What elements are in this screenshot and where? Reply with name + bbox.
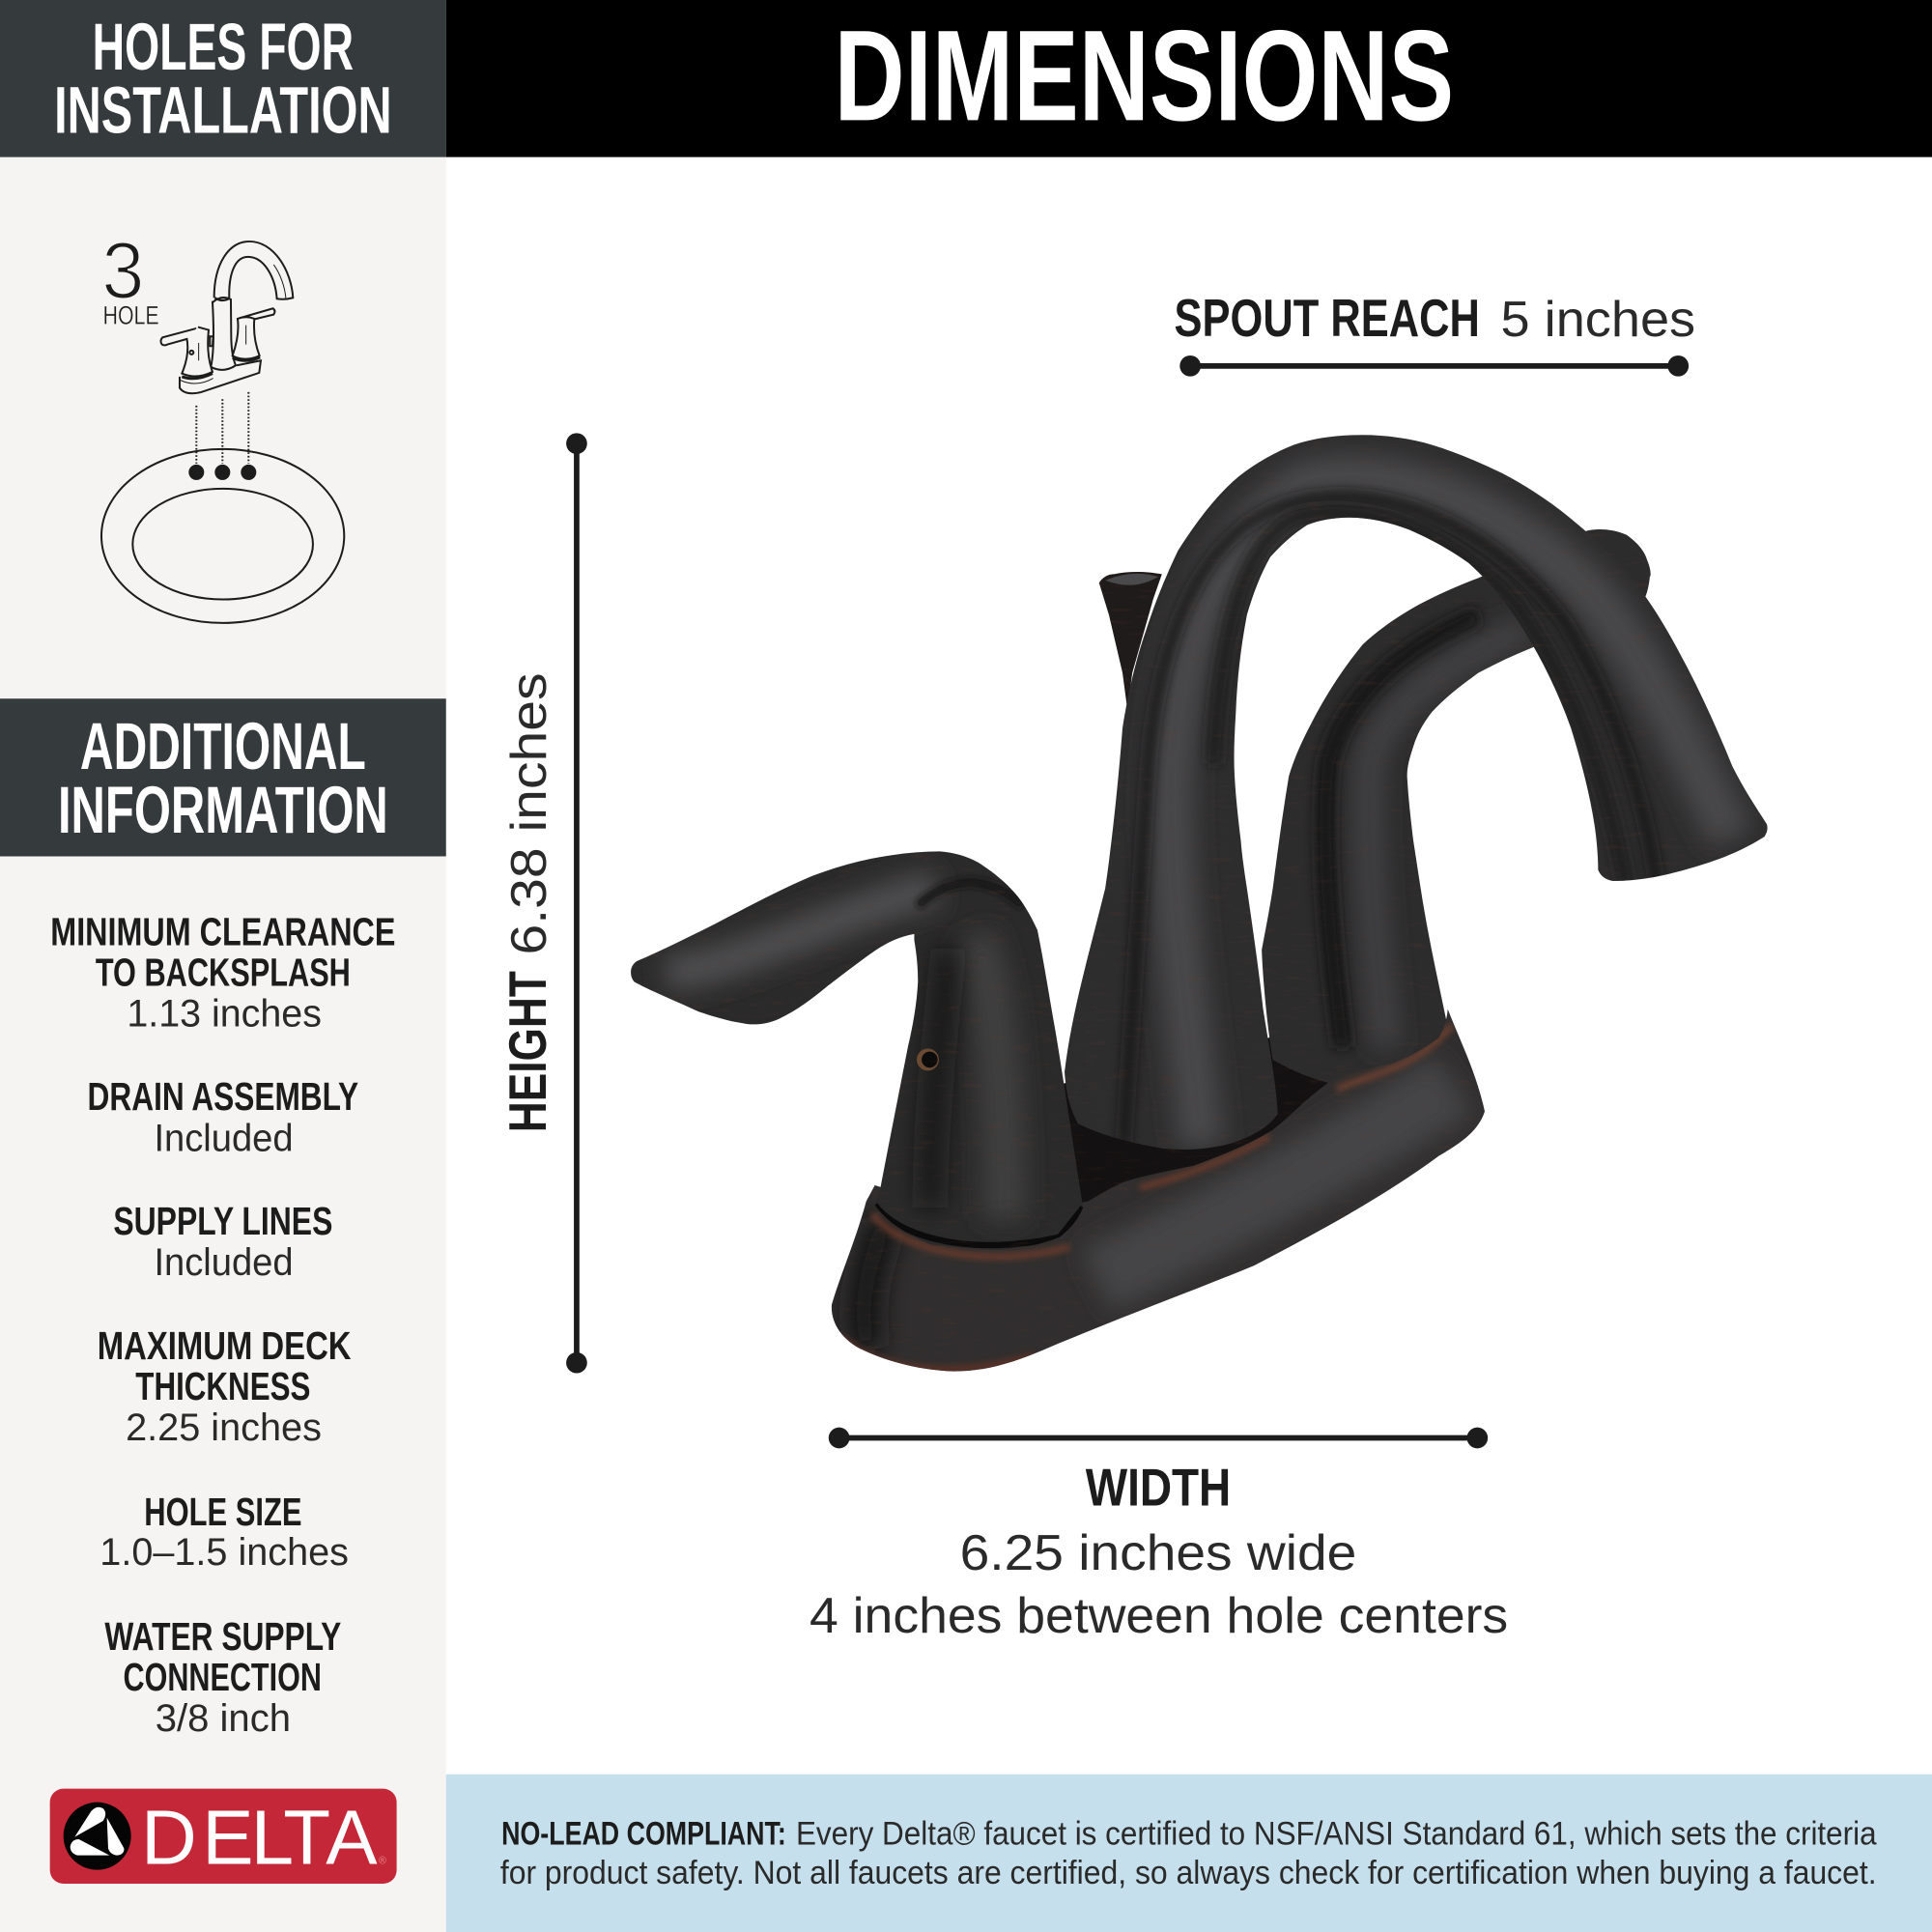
text: 3 hole — [101, 225, 159, 330]
faucet: front handle — [631, 851, 1083, 1249]
dimension: height: 6.38 inches — [501, 672, 557, 955]
faucet: spout — [1065, 435, 1768, 1150]
dimension: width: 6.25 inches wide — [960, 1525, 1356, 1581]
dimension: height — [497, 433, 587, 1374]
dimension: width: WIDTH — [1086, 1458, 1231, 1518]
dimension: spout reach: SPOUT REACH — [1175, 288, 1480, 348]
panel: left sidebar — [0, 156, 446, 1932]
text: hole size — [99, 1490, 349, 1574]
heading: holes for installation — [0, 0, 446, 157]
faucet: pop-up rod — [1099, 572, 1162, 710]
title: dimensions — [446, 0, 1932, 157]
title: dimensions: DIMENSIONS — [835, 4, 1454, 148]
heading: additional information: INFORMATION — [58, 773, 388, 847]
text: maximum deck thickness: MAXIMUM DECK — [98, 1323, 352, 1368]
text: maximum deck thickness: THICKNESS — [135, 1364, 310, 1408]
text: water supply connection: CONNECTION — [124, 1655, 322, 1699]
text: drain assembly — [88, 1074, 358, 1159]
faucet: rear handle — [1262, 529, 1651, 1088]
logo: delta — [50, 1789, 397, 1884]
heading: holes for installation: INSTALLATION — [54, 73, 392, 148]
heading: additional information: ADDITIONAL — [80, 709, 366, 783]
callout: no-lead compliant — [446, 1775, 1932, 1932]
photo: faucet — [631, 435, 1768, 1372]
dimension: spout reach — [1175, 288, 1695, 377]
text: 3 hole: HOLE — [103, 301, 159, 330]
text: minimum clearance: TO BACKSPLASH — [96, 950, 351, 994]
icon: dotted lines — [196, 392, 248, 464]
callout: no-lead compliant: NO-LEAD COMPLIANT: — [501, 1815, 786, 1852]
icon: sink — [101, 449, 344, 623]
faucet: handle screw hole — [917, 1048, 939, 1070]
dimension: width: 4 inches between hole centers — [810, 1588, 1508, 1644]
text: drain assembly: Included — [154, 1117, 294, 1159]
faucet: plate shadow — [1060, 1035, 1355, 1220]
text: hole size: HOLE SIZE — [144, 1490, 301, 1534]
faucet: deck plate — [832, 1009, 1485, 1372]
dimension: spout reach: 5 inches — [1501, 292, 1695, 348]
text: minimum clearance: 1.13 inches — [127, 992, 322, 1035]
logo: delta: ® — [379, 1855, 386, 1866]
dimension: height: HEIGHT — [497, 971, 557, 1132]
icon: line faucet — [160, 242, 293, 393]
text: hole size: 1.0–1.5 inches — [99, 1531, 349, 1574]
text: drain assembly: DRAIN ASSEMBLY — [88, 1074, 358, 1119]
heading: holes for installation: HOLES FOR — [93, 10, 354, 84]
text: maximum deck thickness: 2.25 inches — [126, 1406, 322, 1449]
text: minimum clearance: MINIMUM CLEARANCE — [50, 909, 395, 953]
logo: delta: DELTA — [141, 1794, 378, 1880]
text: minimum clearance — [50, 909, 395, 1036]
text: water supply connection — [104, 1614, 341, 1740]
icon: three hole faucet and sink diagram — [101, 225, 344, 623]
text: water supply connection: WATER SUPPLY — [104, 1614, 341, 1659]
text: 3 hole: 3 — [101, 225, 144, 315]
heading: additional information — [0, 698, 446, 856]
text: maximum deck thickness — [98, 1323, 352, 1449]
text: supply lines: Included — [154, 1241, 294, 1284]
dimension: width — [810, 1428, 1508, 1644]
text: supply lines — [113, 1199, 332, 1284]
text: water supply connection: 3/8 inch — [156, 1697, 291, 1740]
text: supply lines: SUPPLY LINES — [113, 1199, 332, 1243]
